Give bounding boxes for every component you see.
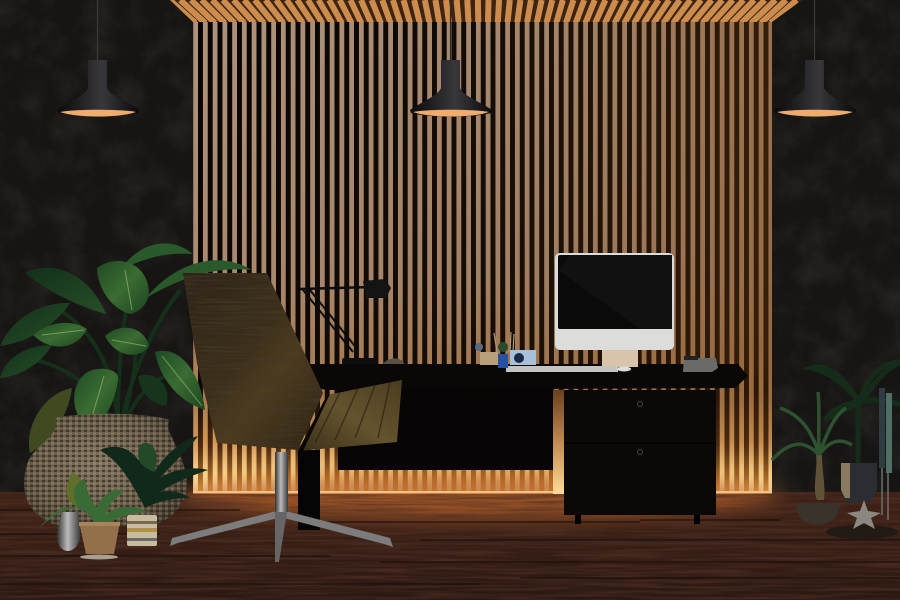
terracotta pot with spiky plant [39,478,148,560]
ponytail palm [772,392,852,500]
pendant lamp: left [57,0,139,117]
leaf: center [105,328,149,355]
woven basket [24,414,187,526]
pendant lamp: center [410,0,492,117]
leaf: lower left [0,345,52,378]
leaf: right [155,351,205,410]
large potted plant [0,243,252,453]
keyboard and mouse [506,366,631,372]
gray pot [841,463,877,502]
wood ceiling slats [170,0,802,23]
leaf: far left [0,303,70,346]
candles [879,388,892,520]
monitor [555,253,674,367]
right side plants [772,362,900,539]
back palm [812,362,900,465]
chair back [180,270,326,452]
slatted wood wall [193,18,772,493]
silver vase and yellow succulent [57,472,86,551]
decorative tray and star [826,500,898,539]
desk [298,364,748,530]
leaf: left center [33,323,87,347]
wood floor [0,472,900,600]
leaf: top arch [120,243,193,270]
leaf: large upper [97,261,149,314]
pendant lamp: right [774,0,856,117]
drawer pedestal [564,390,716,524]
modesty panel [338,388,553,470]
leaf: low left olive [29,388,72,453]
phone [683,356,718,372]
pen holder and desk objects [475,332,536,368]
plant stems [25,290,185,420]
dark small plant [100,436,208,508]
desk lamp [300,279,391,372]
striped pot [127,515,157,546]
leaf: long right arch [146,260,252,298]
desk bell [383,358,405,366]
chair arm panel [298,380,402,451]
office chair [170,270,402,562]
leaf: upper left [25,268,106,314]
leaf: lower center [74,369,118,428]
desk leg [298,450,320,530]
bowl [795,503,842,525]
glow slit [553,390,564,494]
leaf: middle right dark [138,375,168,406]
chair base [170,452,393,562]
desk top [308,364,748,390]
leaf midribs [42,270,202,424]
